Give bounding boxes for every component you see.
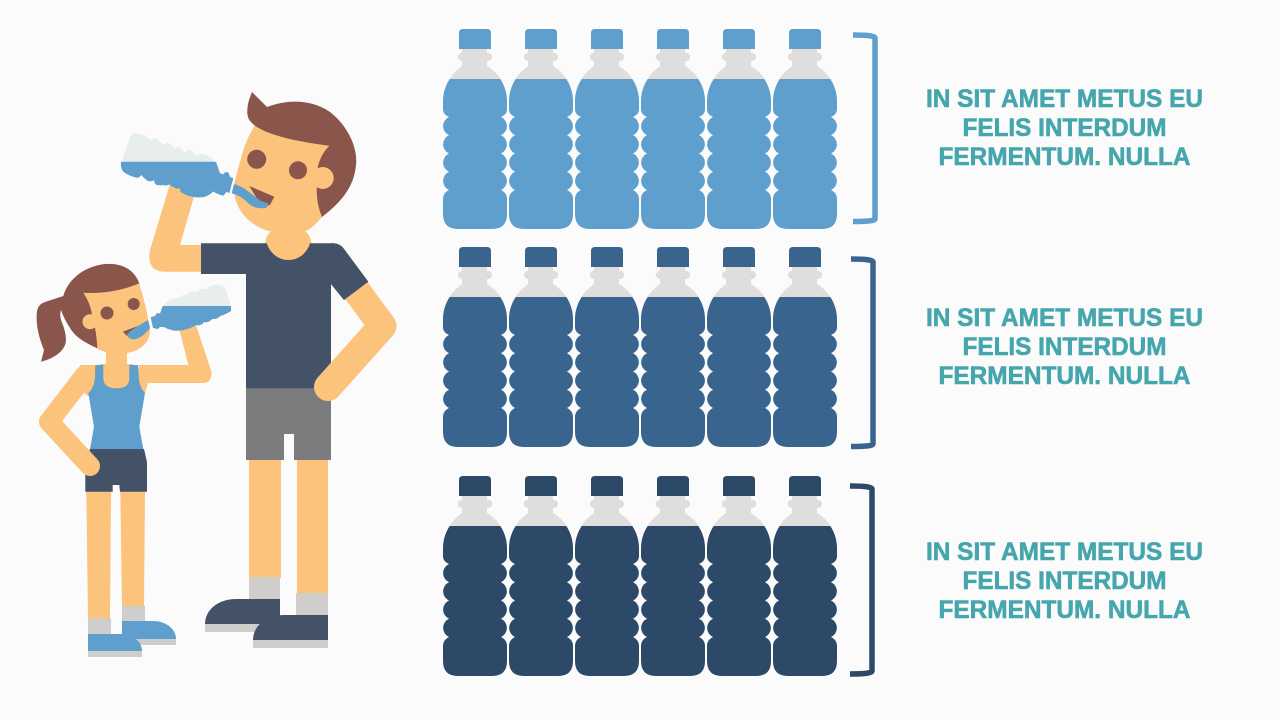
label row 2: FERMENTUM. NULLA	[938, 362, 1190, 390]
bottle row 2: medium blue	[443, 247, 837, 447]
bottle	[641, 247, 705, 447]
girl legs	[86, 490, 145, 619]
girl bent arm	[49, 375, 90, 466]
girl shorts	[85, 449, 147, 492]
man sleeve	[331, 243, 368, 300]
bottle	[707, 29, 771, 229]
ear	[312, 167, 334, 189]
hair	[247, 92, 356, 217]
bottle	[773, 476, 837, 676]
bottle	[575, 476, 639, 676]
bottle	[641, 476, 705, 676]
man legs	[249, 458, 328, 594]
girl raised arm	[135, 322, 212, 393]
bottle	[509, 476, 573, 676]
bottle	[641, 29, 705, 229]
bottle	[773, 29, 837, 229]
label row 3: FELIS INTERDUM	[962, 567, 1166, 595]
girl water bottle	[151, 285, 231, 331]
man neck and head	[232, 92, 356, 261]
eyes	[247, 150, 307, 179]
girl ear	[82, 314, 98, 329]
label row 1: FERMENTUM. NULLA	[938, 143, 1190, 171]
girl mouth	[123, 323, 146, 336]
man socks and shoes	[205, 577, 328, 648]
water stream	[232, 184, 268, 208]
bottle row 1: light blue	[443, 29, 837, 229]
girl eyes	[100, 298, 140, 320]
girl hair and ponytail	[37, 264, 139, 362]
label row 1: IN SIT AMET METUS EU	[926, 85, 1203, 113]
bottle	[443, 247, 507, 447]
girl water stream	[127, 320, 150, 339]
girl shoulder	[76, 365, 100, 396]
bottle	[707, 247, 771, 447]
man other arm	[328, 290, 382, 387]
label row 3: IN SIT AMET METUS EU	[926, 538, 1203, 566]
girl neck and head	[37, 264, 150, 391]
bottle	[707, 476, 771, 676]
collar skin	[265, 225, 311, 261]
man raised arm	[149, 184, 204, 272]
bracket row 3	[850, 486, 872, 674]
bracket row 2	[851, 259, 873, 446]
man shirt	[201, 243, 368, 388]
girl collar skin	[100, 364, 133, 391]
label row 2: FELIS INTERDUM	[962, 333, 1166, 361]
bottle row 3: dark blue	[443, 476, 837, 676]
bottle	[575, 29, 639, 229]
bracket row 1	[853, 35, 875, 222]
girl figure	[37, 264, 231, 657]
bottle	[509, 247, 573, 447]
girl socks and shoes	[88, 606, 176, 657]
label row 3: FERMENTUM. NULLA	[938, 596, 1190, 624]
bottle	[443, 29, 507, 229]
bottle	[443, 476, 507, 676]
label row 2	[926, 304, 1203, 390]
bottle	[575, 247, 639, 447]
label row 3	[926, 538, 1203, 624]
man figure	[121, 92, 383, 648]
man water bottle	[121, 133, 233, 197]
bottle	[509, 29, 573, 229]
label row 1	[926, 85, 1203, 171]
label row 2: IN SIT AMET METUS EU	[926, 304, 1203, 332]
girl tank top	[88, 365, 146, 460]
man shorts	[246, 388, 331, 460]
label row 1: FELIS INTERDUM	[962, 114, 1166, 142]
mouth	[249, 186, 274, 207]
bottle	[773, 247, 837, 447]
